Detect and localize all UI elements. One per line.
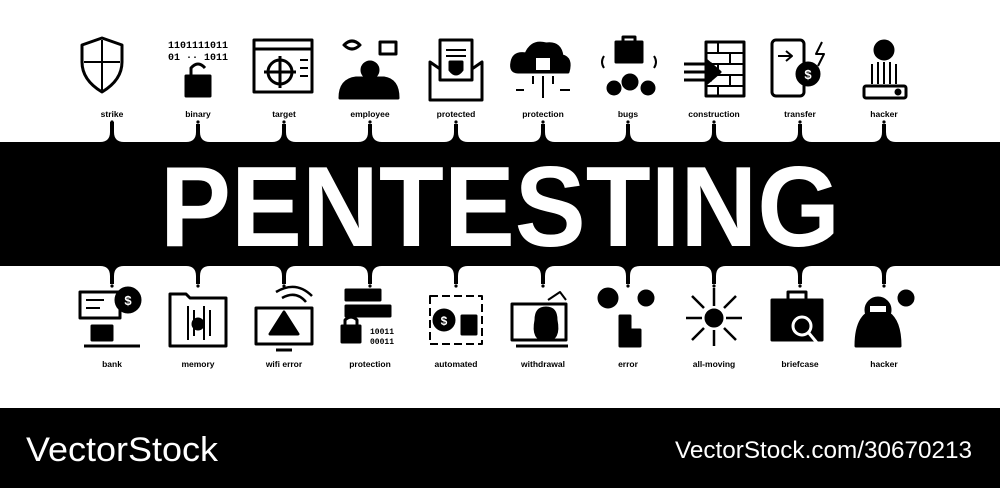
icon: error hand (599, 289, 653, 346)
bottom labels: error (618, 359, 639, 369)
icon: employee (340, 41, 398, 98)
icon: automated (430, 296, 482, 344)
top labels: target (272, 109, 296, 119)
icon: binary lock (168, 41, 228, 96)
icon: memory folder (170, 294, 226, 346)
bottom labels: all-moving (693, 359, 735, 369)
icon: binary lock: 01 ·· 1011 (168, 53, 228, 64)
title band (0, 142, 1000, 271)
icon: transfer phone (772, 40, 824, 96)
top icons (82, 37, 906, 100)
bottom labels: hacker (870, 359, 898, 369)
icon: protected envelope (430, 40, 482, 100)
icon: target window (254, 40, 312, 92)
top labels: protection (522, 109, 564, 119)
bottom labels: withdrawal (520, 359, 565, 369)
top labels: protected (437, 109, 475, 119)
icon: automated: $ (441, 314, 448, 328)
icon: transfer phone: $ (804, 67, 812, 82)
top labels: construction (688, 109, 740, 119)
title text: PENTESTING (160, 144, 840, 271)
footer logo text: VectorStock (26, 431, 219, 469)
icon: binary lock: 1101111011 (168, 41, 228, 52)
icon: protection blocks: 00011 (370, 338, 394, 347)
icon: wifi error (256, 287, 312, 350)
footer url text: VectorStock.com/30670213 (675, 437, 972, 464)
icon: bank (80, 288, 140, 346)
icon: bank: $ (124, 293, 132, 308)
icon: shield (82, 38, 122, 92)
icon: briefcase (772, 292, 822, 344)
icon: hacker server (864, 41, 906, 98)
icon: cloud lock (512, 43, 570, 98)
top labels: hacker (870, 109, 898, 119)
bottom labels: memory (181, 359, 215, 369)
icon: protection blocks: 10011 (370, 328, 394, 337)
bottom labels (102, 359, 898, 369)
top connectors (100, 120, 896, 142)
top labels: binary (185, 109, 211, 119)
icon: withdrawal (512, 292, 568, 346)
icon: hacker (856, 291, 913, 346)
top labels: bugs (618, 109, 638, 119)
bottom labels: bank (102, 359, 122, 369)
icon: all-moving (686, 288, 742, 346)
bottom connectors (100, 266, 896, 288)
icon: protection blocks (342, 290, 394, 347)
top labels: transfer (784, 109, 817, 119)
icon: bugs (602, 37, 656, 94)
bottom labels: briefcase (781, 359, 819, 369)
top labels: strike (101, 109, 124, 119)
icon: construction wall (684, 42, 744, 96)
top labels: employee (350, 109, 390, 119)
bottom labels: protection (349, 359, 391, 369)
footer (0, 408, 1000, 488)
bottom labels: automated (435, 359, 477, 369)
bottom labels: wifi error (265, 359, 303, 369)
bottom icons (80, 287, 913, 350)
top labels (101, 109, 898, 119)
